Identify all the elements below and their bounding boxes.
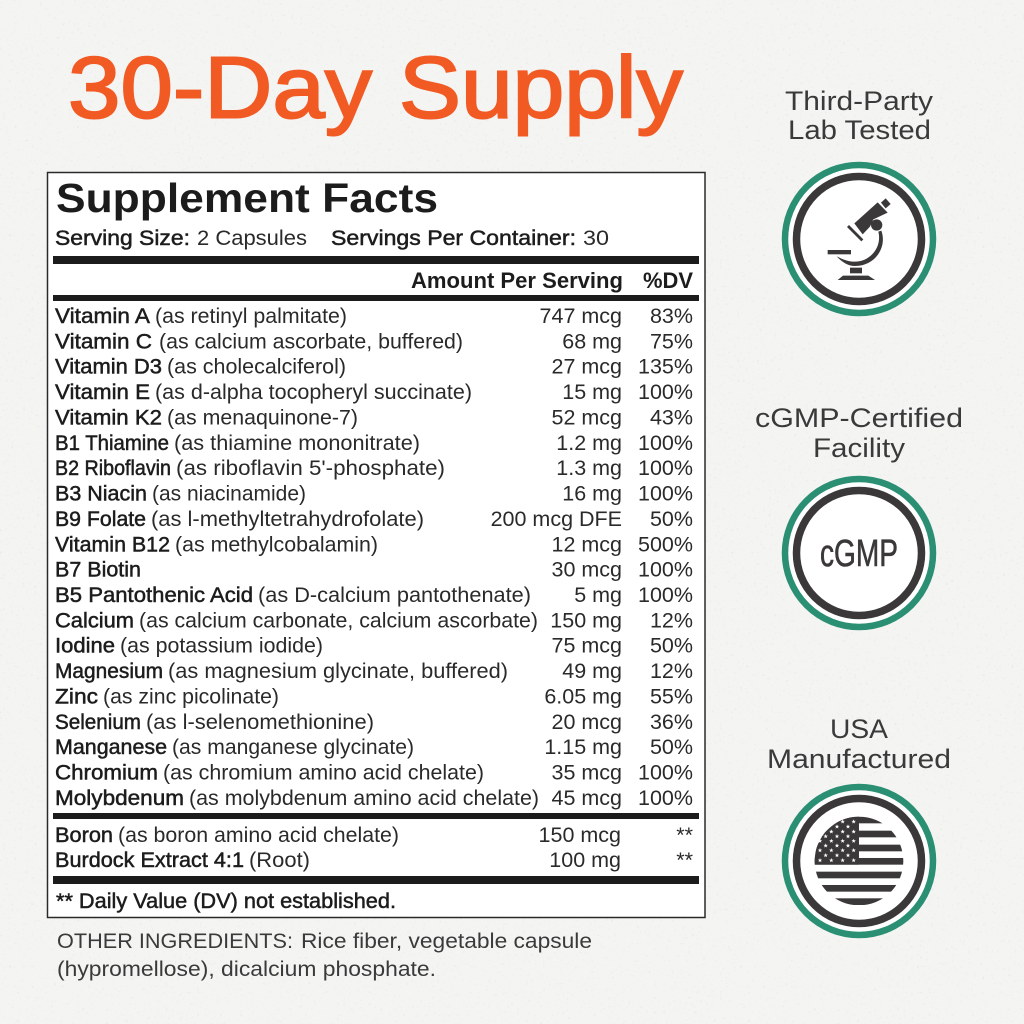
row: B3 Niacin: B3 Niacin (55, 483, 147, 506)
row: Vitamin A: 747 mcg (540, 304, 622, 328)
row: Vitamin D3: 135% (638, 355, 693, 379)
heading: third-party lab tested (785, 86, 934, 145)
row: B7 Biotin: 30 mcg (551, 558, 622, 582)
row: B9 Folate: (as l-methyltetrahydrofolate) (151, 508, 424, 531)
row: Molybdenum: Molybdenum (55, 787, 184, 810)
row: Vitamin D3: (as cholecalciferol) (167, 356, 346, 379)
row: Vitamin B12: Vitamin B12 (55, 533, 170, 556)
row: Vitamin A: 83% (650, 304, 693, 328)
row: Vitamin C (55, 329, 693, 353)
icon: cgmp badge: cGMP (820, 533, 898, 575)
heading: third-party lab tested: Third-Party (785, 86, 934, 116)
icon: microscope badge (785, 165, 933, 313)
row: B3 Niacin: 100% (638, 482, 693, 506)
row: B3 Niacin: 16 mg (562, 482, 622, 506)
row: Burdock Extract: (Root) (249, 849, 310, 872)
row: B7 Biotin: B7 Biotin (55, 559, 141, 582)
serving information: 2 Capsules (197, 227, 307, 250)
title (68, 40, 684, 136)
row: B9 Folate: B9 Folate (55, 508, 146, 531)
row: B1 Thiamine: (as thiamine mononitrate) (174, 432, 420, 455)
row: Boron: Boron (55, 824, 113, 847)
other ingredients: OTHER INGREDIENTS: (57, 930, 293, 953)
row: B2 Riboflavin: B2 Riboflavin (55, 457, 171, 480)
row: Iodine: (as potassium iodide) (120, 635, 323, 658)
row: B5 Pantothenic Acid: (as D-calcium pantothenate) (258, 584, 531, 607)
row: B5 Pantothenic Acid (55, 583, 693, 607)
serving information: 30 (583, 227, 609, 250)
row: B2 Riboflavin: (as riboflavin 5'-phosphate) (176, 457, 445, 480)
row: Vitamin B12: 12 mcg (551, 532, 622, 556)
row: Selenium: Selenium (55, 711, 141, 734)
row: B9 Folate (55, 507, 693, 531)
row: Magnesium: Magnesium (55, 660, 163, 683)
row: B7 Biotin (55, 558, 693, 582)
row: Vitamin E: Vitamin E (55, 381, 150, 404)
heading: usa manufactured (767, 714, 951, 774)
row: Vitamin A: Vitamin A (55, 305, 150, 328)
row: Chromium: 100% (638, 761, 693, 785)
row: B5 Pantothenic Acid: B5 Pantothenic Acid (55, 584, 253, 607)
row: Manganese: (as manganese glycinate) (172, 736, 414, 759)
row: Vitamin A: (as retinyl palmitate) (155, 305, 347, 328)
row: Zinc: Zinc (55, 686, 98, 708)
row: B3 Niacin (55, 482, 693, 506)
row: Chromium: Chromium (55, 762, 158, 785)
row: Vitamin D3 (55, 355, 693, 379)
row: Magnesium: (as magnesium glycinate, buffered) (168, 660, 508, 683)
row: Magnesium (55, 659, 693, 683)
row: Vitamin C: (as calcium ascorbate, buffered) (159, 330, 463, 353)
panel: supplement facts (48, 172, 705, 918)
row: Iodine: Iodine (55, 635, 115, 658)
row: B1 Thiamine: 100% (638, 431, 693, 455)
row: B2 Riboflavin: 100% (638, 456, 693, 480)
row: Calcium: 12% (650, 608, 693, 632)
row: Calcium: Calcium (55, 609, 134, 632)
row: B1 Thiamine (55, 431, 693, 455)
row: Boron: 150 mcg (539, 823, 621, 847)
row: Magnesium: 49 mg (562, 659, 622, 683)
row: Vitamin B12 (55, 532, 693, 556)
heading: cgmp-certified facility: cGMP-Certified (755, 403, 963, 433)
row: Vitamin B12: (as methylcobalamin) (175, 533, 378, 556)
title: 30-Day (68, 40, 373, 136)
serving information: Servings Per Container: (331, 227, 576, 250)
row: Molybdenum (55, 786, 693, 810)
row: Magnesium: 12% (650, 659, 693, 683)
row: Vitamin C: 68 mg (562, 329, 622, 353)
row: Vitamin B12: 500% (638, 532, 693, 556)
heading: third-party lab tested: Lab Tested (788, 115, 931, 145)
serving information: Serving Size: (55, 227, 190, 250)
row: Vitamin A (55, 304, 693, 328)
row: Calcium: 150 mg (550, 608, 622, 632)
row: Selenium: (as l-selenomethionine) (146, 711, 374, 734)
other ingredients: Rice fiber, vegetable capsule (301, 930, 592, 953)
row: Vitamin E: (as d-alpha tocopheryl succinate) (155, 381, 472, 404)
other ingredients: (hypromellose), dicalcium phosphate. (57, 958, 436, 981)
row: Manganese: 1.15 mg (544, 735, 622, 759)
row: Vitamin K2: Vitamin K2 (55, 406, 162, 430)
serving information (55, 227, 609, 250)
row: Burdock Extract: Burdock Extract 4:1 (55, 849, 244, 872)
row: Molybdenum: 100% (638, 786, 693, 810)
title: Supply (399, 40, 684, 136)
row: Iodine (55, 634, 693, 658)
row: Manganese: 50% (650, 735, 693, 759)
row: B2 Riboflavin: 1.3 mg (556, 456, 622, 480)
row: Vitamin E: 100% (638, 380, 693, 404)
row: B9 Folate: 50% (650, 507, 693, 531)
row: Manganese: Manganese (55, 736, 167, 759)
row: Molybdenum: (as molybdenum amino acid chelate) (189, 787, 539, 810)
row: Vitamin E: 15 mg (562, 380, 622, 404)
row: Zinc: (as zinc picolinate) (103, 686, 279, 708)
row: B9 Folate: 200 mcg DFE (491, 507, 622, 531)
row: Selenium: 20 mcg (551, 710, 622, 734)
row: Zinc: 6.05 mg (544, 684, 622, 708)
row: Chromium (55, 761, 693, 785)
row: B5 Pantothenic Acid: 100% (638, 583, 693, 607)
row: Vitamin K2 (55, 406, 693, 430)
other ingredients (57, 930, 592, 981)
column headers: Amount Per Serving (411, 268, 623, 293)
row: Vitamin K2: 43% (650, 406, 693, 430)
row: Boron: (as boron amino acid chelate) (118, 824, 399, 847)
row: Vitamin D3: 27 mcg (551, 355, 622, 379)
row: Iodine: 75 mcg (551, 634, 622, 658)
row: B3 Niacin: (as niacinamide) (152, 483, 306, 506)
heading: usa manufactured: USA (830, 714, 888, 744)
row: Vitamin C: Vitamin C (55, 330, 152, 353)
row: Burdock Extract (55, 848, 694, 872)
row: Vitamin D3: Vitamin D3 (55, 356, 162, 379)
row: Calcium (55, 608, 693, 632)
row: Burdock Extract: ** (676, 848, 694, 872)
row: Boron (55, 823, 694, 847)
row: B1 Thiamine: 1.2 mg (556, 431, 622, 455)
heading: supplement facts: Supplement Facts (56, 175, 438, 221)
row: B1 Thiamine: B1 Thiamine (55, 432, 169, 455)
row: Vitamin E (55, 380, 693, 404)
heading: cgmp-certified facility: Facility (813, 433, 906, 463)
row: Selenium (55, 710, 693, 734)
row: Zinc: 55% (650, 684, 693, 708)
footnote: ** Daily Value (DV) not established. (56, 890, 396, 913)
row: Vitamin C: 75% (650, 329, 693, 353)
row: Boron: ** (676, 823, 694, 847)
icon: usa flag badge (785, 787, 933, 935)
heading: usa manufactured: Manufactured (767, 744, 951, 774)
heading: cgmp-certified facility (755, 403, 963, 463)
row: Manganese (55, 735, 693, 759)
row: Zinc (55, 684, 693, 708)
column headers: %DV (643, 268, 693, 293)
row: B5 Pantothenic Acid: 5 mg (574, 583, 622, 607)
row: Iodine: 50% (650, 634, 693, 658)
row: B7 Biotin: 100% (638, 558, 693, 582)
row: Chromium: 35 mcg (551, 761, 622, 785)
icon: cgmp badge (785, 479, 933, 627)
row: Calcium: (as calcium carbonate, calcium ascorbate) (139, 609, 538, 632)
row: Chromium: (as chromium amino acid chelate) (163, 762, 484, 785)
row: Selenium: 36% (650, 710, 693, 734)
row: Vitamin K2: (as menaquinone-7) (167, 406, 358, 430)
row: Vitamin K2: 52 mcg (551, 406, 622, 430)
row: B2 Riboflavin (55, 456, 693, 480)
row: Burdock Extract: 100 mg (549, 848, 621, 872)
row: Molybdenum: 45 mcg (551, 786, 622, 810)
